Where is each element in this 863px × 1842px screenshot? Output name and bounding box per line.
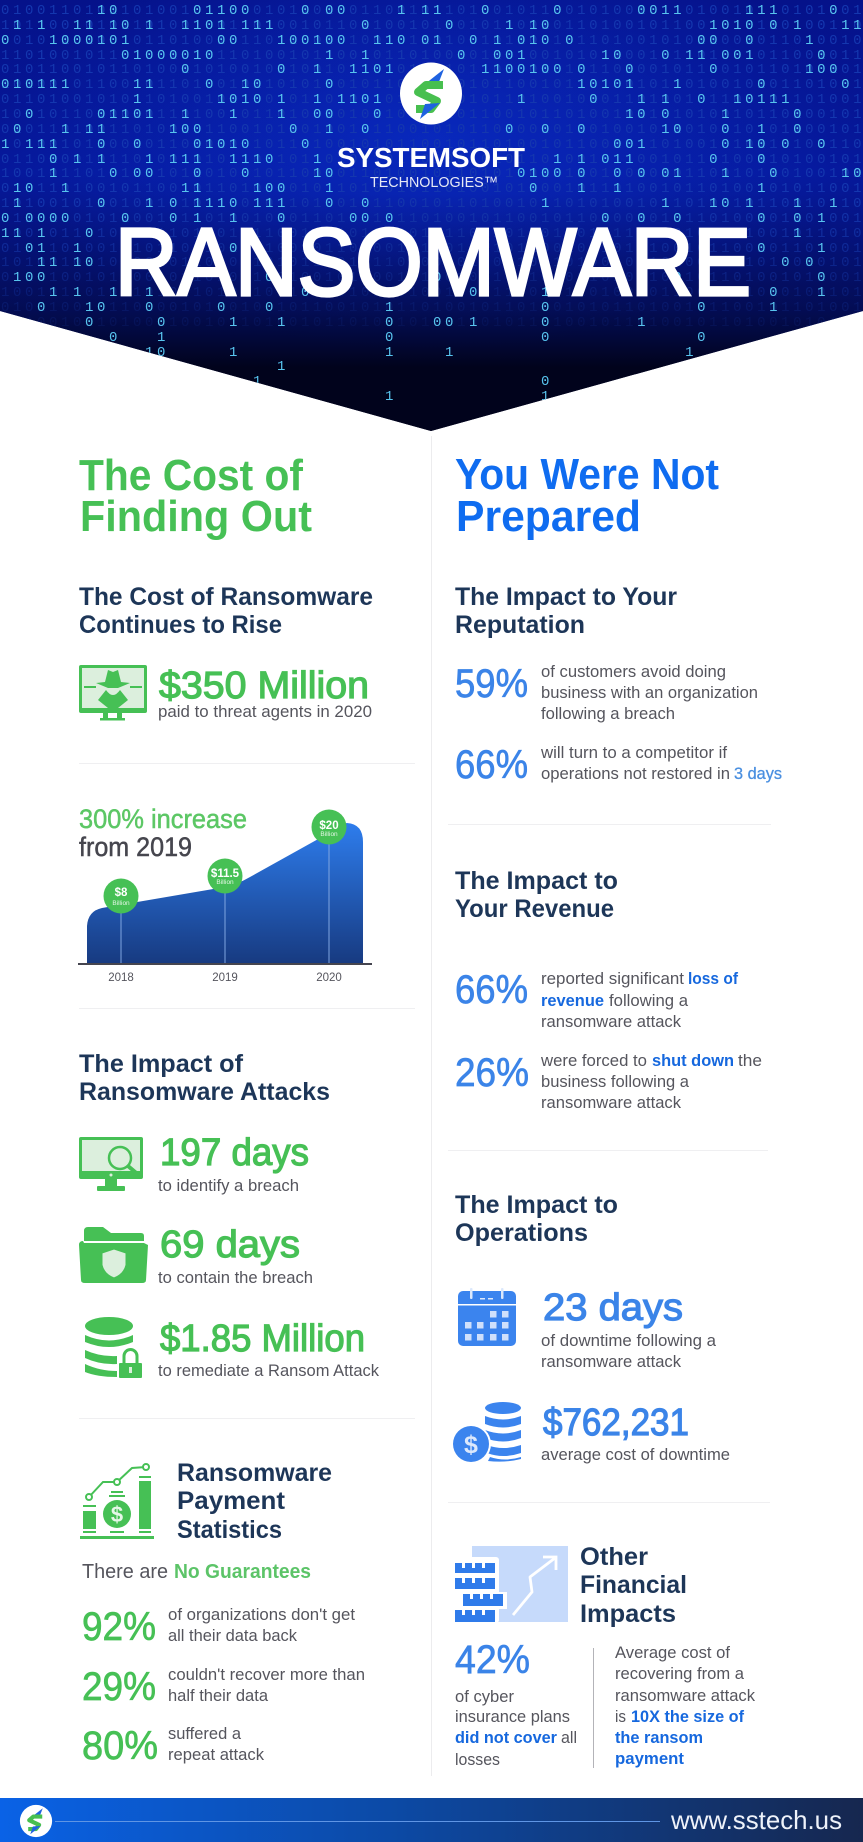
header banner: binary code background: 0 10 0 0 0 1 0 0 1 (1, 300, 781, 316)
footer logo (20, 1805, 52, 1837)
header banner: binary code background: 1 1010 1 1 1101 1 0 1 1 0 10111 (1, 92, 793, 108)
text: average cost of recovering: Average cost of (615, 1644, 730, 1662)
left heading: The Cost of Finding Out: Finding Out (80, 492, 312, 541)
stat: 26%: were forced to (540, 1052, 647, 1070)
subheading: impact of attacks (79, 1050, 330, 1106)
stat: 80%: suffered a (168, 1725, 242, 1743)
subheading: other financial impacts (580, 1543, 687, 1628)
subheading: cost of ransomware: Continues to Rise (79, 611, 282, 639)
stat: 26%: shut down (652, 1052, 734, 1070)
text: average cost of recovering: the ransom (615, 1729, 703, 1747)
stat: 66% competitor: 66% (455, 743, 528, 787)
header banner: binary code background: 010110100101011001011010010110100101101001011001011010100101100101101001 (1, 241, 863, 257)
subheading: impact of attacks: Ransomware Attacks (79, 1078, 330, 1106)
text: average cost of recovering (615, 1644, 756, 1768)
logo wordmark: SYSTEMSOFT (337, 142, 525, 173)
subheading: impact to revenue: Your Revenue (455, 895, 614, 923)
stat: $350 Million: paid to threat agents in 2020 (158, 703, 372, 721)
stat: 66% revenue: loss of (688, 970, 738, 988)
header banner: binary code background: 100101101001010110100101101001011010010101100101101001011001011010100101 (1, 285, 863, 301)
header banner: binary code background: 10 1 1 1 1 (1, 345, 697, 361)
header banner: binary code background: 0 01101 1 1 1 00 0 10 0 1 0 (1, 107, 805, 123)
subheading: impact to reputation: The Impact to Your (455, 583, 677, 611)
icon: coin stack with dollar (451, 1402, 521, 1464)
stat: 26%: ransomware attack (541, 1094, 682, 1112)
area chart: ransomware cost 2018-2020: $8 (115, 887, 128, 899)
subheading: cost of ransomware: The Cost of Ransomware (79, 583, 373, 611)
stat: 197 days (158, 1132, 309, 1195)
stat: 80% (82, 1724, 265, 1768)
subheading: ransomware payment statistics: Statistics (177, 1516, 282, 1544)
stat: 69 days: 69 days (160, 1224, 300, 1266)
header banner: binary code background: 100101101010010110100101100101101001011010100101101001010110010110100101 (1, 166, 863, 182)
stat: 42%: 42% (455, 1638, 530, 1682)
header banner: binary code background: 1 (1, 359, 289, 375)
stat: 59%: 59% (455, 662, 528, 706)
stat: 23 days: 23 days (543, 1287, 683, 1329)
stat: 29%: half their data (168, 1687, 269, 1705)
stat: 26%: the (738, 1052, 762, 1070)
subheading: impact of attacks: The Impact of (79, 1050, 244, 1078)
header banner: binary code background: 010110100101100101101001010110100101101001011001011010010110100101011001 (1, 181, 863, 197)
area chart: ransomware cost 2018-2020: Billion (320, 831, 338, 838)
text: average cost of recovering: ransomware attack (615, 1687, 756, 1705)
logo wordmark (337, 142, 525, 191)
stat: 66% revenue: reported significant (541, 970, 684, 988)
header banner: binary code background: 0 1 1 1 111 1110 1 1 1 011 0 0 (1, 152, 769, 168)
text: There are No Guarantees: No Guarantees (174, 1561, 311, 1583)
subheading: impact to reputation (455, 583, 677, 639)
stat: $350 Million: $350 Million (159, 665, 369, 707)
right heading: You Were Not Prepared: You Were Not (455, 450, 719, 499)
chart heading: 300% increase: from 2019 (79, 832, 192, 862)
stat: 92%: of organizations don't get (168, 1606, 355, 1624)
chart heading: 300% increase: 300% increase (79, 804, 247, 834)
stat: 197 days: to identify a breach (158, 1177, 299, 1195)
subheading: other financial impacts: Impacts (580, 1600, 676, 1628)
icon: bricks and rising arrow (452, 1546, 568, 1623)
icon: coin stack with dollar: $ (464, 1431, 478, 1459)
stat: 66% competitor: will turn to a competitor if (540, 744, 727, 762)
stat: 59%: of customers avoid doing (541, 663, 726, 681)
stat: $1.85 Million: to remediate a Ransom Attack (158, 1362, 380, 1380)
subheading: impact to operations (455, 1191, 618, 1247)
text: average cost of recovering: 10X the size of (631, 1708, 744, 1726)
icon: database with lock (85, 1317, 142, 1378)
area chart: ransomware cost 2018-2020: 2019 (212, 972, 238, 984)
stat: 69 days: to contain the breach (158, 1269, 313, 1287)
header banner: binary code background: 100101101001011010010110010110101001011001011010010110100101011001011010 (1, 226, 863, 242)
icon: payment statistics chart: $ (111, 1502, 123, 1527)
icon: payment statistics chart (80, 1464, 154, 1539)
header banner: binary code background: 1 0 1 0 1110 111 0 0 1 1 10 1 1 1 (1, 196, 841, 212)
area chart: ransomware cost 2018-2020: 2018 (108, 972, 134, 984)
header banner: binary code background: 0 1 11 100 0 1 0 0 0 0 10 0 1 0 (1, 122, 805, 138)
header banner: binary code background: 10 01100 0 00 1 11 0 0 0011 111 0 (1, 3, 841, 19)
left heading: The Cost of Finding Out: The Cost of (79, 451, 303, 500)
subheading: other financial impacts: Other (580, 1543, 648, 1571)
subheading: ransomware payment statistics: Payment (177, 1487, 286, 1515)
area chart: ransomware cost 2018-2020 (78, 810, 372, 984)
header banner: binary code background: 010110010110100101101001011001010110100101101001010110100101100101101001 (1, 300, 863, 316)
stat: $1.85 Million (158, 1318, 380, 1380)
header banner: binary code background: 101001011001011010010110101001011010010101100101101001011010010101101001 (1, 77, 863, 93)
stat: 80%: repeat attack (168, 1746, 265, 1764)
header banner: binary code background: 1 0 00 0 0 10 0100 0 0 0 01 1 0 10 (1, 166, 863, 182)
header banner: binary code background: 1 1 1 1 0 0 1 0 1 (1, 285, 829, 301)
header banner: binary code background: 0 0 1 1101 1100100 0 0 0 100 (1, 62, 841, 78)
header banner: binary code background: 1 0 (1, 374, 553, 390)
stat: 66% competitor: operations not restored in (541, 765, 730, 783)
header banner: binary code background: 0 0000 0 0 1 1 0 00 0 0 0 0 0 0 1 (1, 211, 829, 227)
subheading: ransomware payment statistics: Ransomware (177, 1459, 332, 1487)
subheading: ransomware payment statistics (177, 1459, 332, 1544)
stat: 42%: of cyber (455, 1688, 514, 1706)
stat: 66% competitor: 3 days (734, 765, 782, 783)
stat: 80%: 80% (82, 1724, 158, 1768)
text: average cost of recovering: recovering from a (615, 1665, 745, 1683)
header banner: binary code background: 0 1 0 0 0 (1, 330, 709, 346)
icon: monitor with magnifier (79, 1137, 143, 1191)
header banner: binary code background: 010110010110100110100101100101101010010110100101011010010110010110100101 (1, 62, 863, 78)
stat: 66% competitor (455, 743, 782, 787)
stat: 66% revenue: revenue (541, 992, 604, 1010)
header banner: binary code background: 0 1000101 00 100100 110 01 0 1 010 0 00 0 1 (1, 33, 817, 49)
header banner: binary code background: 101001011010010101100101101001011001011010010110101001011010010110010110 (1, 196, 863, 212)
stat: 92% (82, 1605, 355, 1649)
stat: 66% revenue: 66% (455, 968, 528, 1012)
stat: $762,231 (541, 1402, 730, 1464)
header banner: binary code background: 01000010 1 1 0 001 10 0 11 001 0 (1, 48, 829, 64)
text: There are No Guarantees (82, 1561, 311, 1583)
left heading: The Cost of Finding Out (79, 451, 312, 541)
icon: folder with shield (79, 1227, 148, 1283)
subheading: impact to revenue: The Impact to (455, 867, 618, 895)
header banner: binary code background: 011010010101101001011001011010010110100101101001010110100101100101101001 (1, 92, 863, 108)
subheading: cost of ransomware (79, 583, 373, 639)
area chart: ransomware cost 2018-2020: Billion (216, 879, 234, 886)
stat: 92%: all their data back (168, 1627, 298, 1645)
stat: $762,231: average cost of downtime (541, 1446, 730, 1464)
subheading: impact to revenue (455, 867, 618, 923)
stat: 69 days (158, 1224, 313, 1287)
stat: 66% revenue (455, 968, 738, 1031)
area chart: ransomware cost 2018-2020: $11.5 (211, 868, 240, 880)
footer bar (0, 1798, 863, 1842)
header banner: binary code background: 11 1 0 1 (1, 226, 805, 242)
right heading: You Were Not Prepared (455, 450, 719, 541)
header banner: binary code background: 1 1 (1, 389, 553, 405)
header banner: binary code background: 11 10 0 0 0 (1, 255, 817, 271)
subheading: other financial impacts: Financial (580, 1571, 687, 1599)
area chart: ransomware cost 2018-2020: Billion (112, 900, 130, 907)
header banner: binary code background: 100101101001011010010110100101011010010110010110100101101010010110100101 (1, 107, 863, 123)
header banner: binary code background: 010110100110100101100101101001011001010110100101101001011010010101100101 (1, 122, 863, 138)
stat: 42%: all (561, 1729, 577, 1747)
stat: 29% (82, 1665, 365, 1709)
stat: 29%: 29% (82, 1665, 156, 1709)
header banner: binary code background: 001011010010110100101101100101001011010010110010110100101011001011010010 (1, 33, 863, 49)
footer website address: www.sstech.us (670, 1805, 842, 1835)
stat: 23 days: ransomware attack (541, 1353, 682, 1371)
header banner: binary code background: 1 111 0 0 01010 0 001 0 10 0 0 (1, 137, 829, 153)
subheading: impact to operations: Operations (455, 1219, 588, 1247)
logo: Systemsoft emblem (400, 62, 462, 124)
header banner: binary code background: 010011010110100101100010110100110010110100101100101001011010010110101001 (1, 3, 863, 19)
stat: 29%: couldn't recover more than (168, 1666, 365, 1684)
stat: $762,231: $762,231 (543, 1402, 689, 1444)
stat: 59%: business with an organization (541, 684, 758, 702)
header banner: binary code background: 0 0 1 1 0 00 1 0 1 (1, 315, 649, 331)
header banner: binary code background: 10 1 11 100 1 0 1 1 1 (1, 181, 769, 197)
stat: 66% revenue: following a (609, 992, 689, 1010)
stat: 59%: following a breach (541, 705, 675, 723)
stat: 42%: did not cover (455, 1729, 558, 1747)
header banner: binary code background: 1 1 11 10 1 1101 111 0 0 1 10 1010 0 1 11 (1, 18, 863, 34)
title: RANSOMWARE (115, 209, 751, 316)
column divider (431, 436, 432, 1776)
stat: 197 days: 197 days (160, 1132, 309, 1174)
stat: 59% (455, 662, 758, 723)
area chart: ransomware cost 2018-2020: $20 (319, 820, 339, 832)
header banner: binary code background: 101001011001011010100101101001010110010110100101100101101001010110100110 (1, 137, 863, 153)
header banner: binary code background: 101100101011010010011010010110110010100101100101101001011001010110100110 (1, 18, 863, 34)
text: average cost of recovering: is (615, 1708, 626, 1726)
header banner: binary code background: 011010010110010110100101011010010110100101100101101001010110100101101001 (1, 211, 863, 227)
stat: 26%: 26% (455, 1051, 529, 1095)
stat: 26% (455, 1051, 762, 1112)
header banner: binary code background: 010111 11 0 10 0 10101 1 0 0 (1, 77, 853, 93)
stat: 92%: 92% (82, 1605, 156, 1649)
subheading: impact to operations: The Impact to (455, 1191, 618, 1219)
logo wordmark: TECHNOLOGIES™ (370, 174, 498, 191)
header banner: binary code background (0, 0, 863, 432)
subheading: impact to reputation: Reputation (455, 611, 585, 639)
stat: 42%: insurance plans (455, 1708, 570, 1726)
stat: 23 days (541, 1287, 717, 1371)
header banner: binary code background: 101001011010010110100101011001011010010110010110100101101001011010010101 (1, 255, 863, 271)
text: There are No Guarantees: There are (82, 1561, 168, 1583)
text: average cost of recovering: payment (615, 1750, 685, 1768)
header banner: binary code background: 110100101101001010110100101100101101001011010010101100101101001011001011 (1, 48, 863, 64)
header banner: binary code background: 01 1 0 0 1 (1, 241, 829, 257)
chart heading: 300% increase (79, 804, 247, 862)
area chart: ransomware cost 2018-2020: 2020 (316, 972, 342, 984)
stat: 42% (455, 1638, 577, 1769)
header banner: binary code background: 101001011010011001011010010110100101011001011010010110100101101001010110 (1, 315, 863, 331)
icon: calendar (458, 1288, 516, 1346)
header banner: binary code background: 100 0 0 0 0 (1, 270, 829, 286)
stat: 66% revenue: ransomware attack (541, 1013, 682, 1031)
stat: 23 days: of downtime following a (541, 1332, 717, 1350)
stat: $1.85 Million: $1.85 Million (160, 1318, 365, 1360)
stat: 26%: business following a (541, 1073, 690, 1091)
stat: 42%: losses (455, 1751, 500, 1769)
right heading: You Were Not Prepared: Prepared (456, 492, 641, 541)
icon: hacker on monitor (79, 665, 147, 720)
header banner: binary code background: 011010010110010110100110100101100101101001011010010101100101101001011001 (1, 270, 863, 286)
header banner: binary code background: 011010010110100101011001011010010110100101011010010110010110100110100101 (1, 152, 863, 168)
